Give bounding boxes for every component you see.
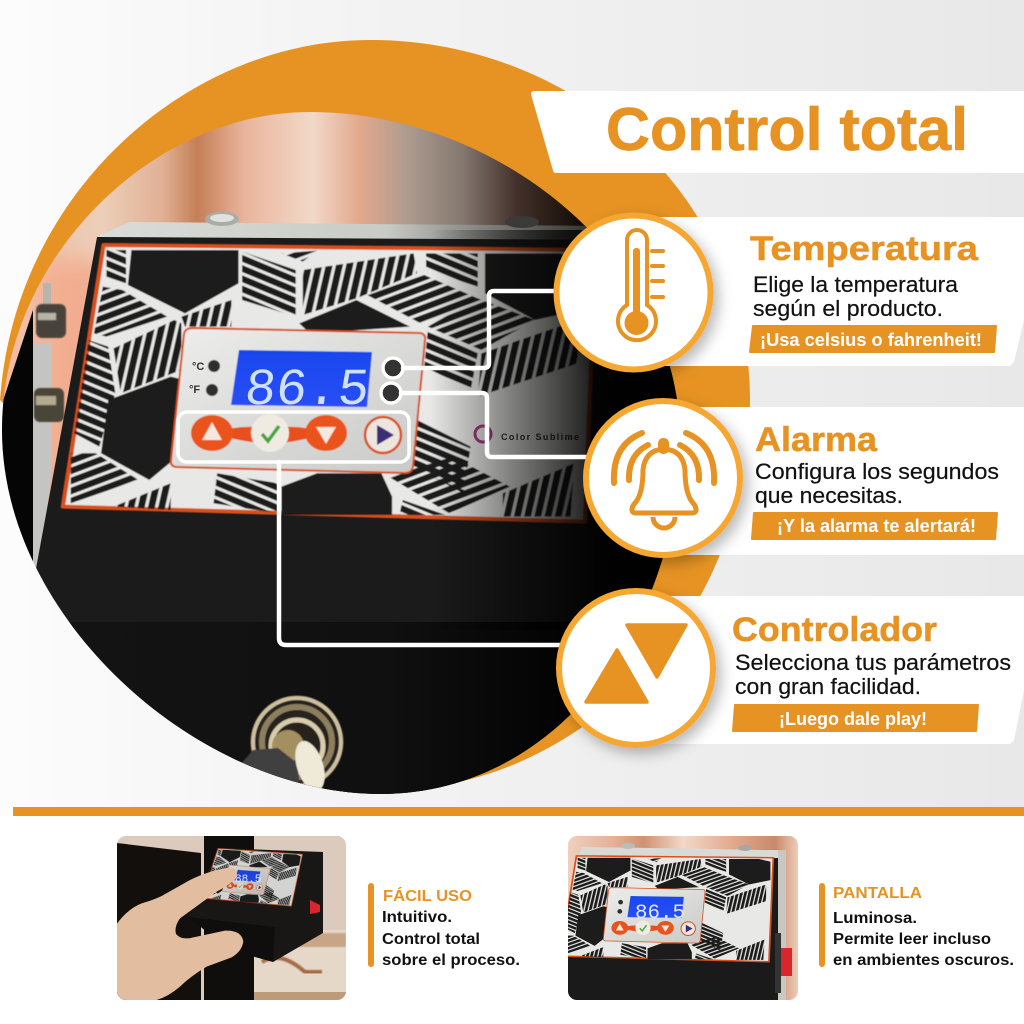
orange circle backdrop	[0, 40, 750, 790]
callout: alarma: ¡Y la alarma te alertará!	[777, 516, 976, 536]
main product photo	[0, 100, 700, 802]
connector lines	[178, 291, 600, 645]
callout: luego dale play: ¡Luego dale play!	[779, 709, 927, 729]
text: alarma description: que necesitas.	[755, 483, 903, 508]
rocker switch	[310, 900, 320, 914]
title banner	[534, 94, 1024, 170]
orange divider bar	[13, 807, 1024, 816]
caption: pantalla: Luminosa.	[833, 910, 917, 927]
caption: fácil uso: Control total	[382, 931, 480, 948]
icon: alarm bell	[586, 401, 740, 555]
caption: fácil uso: Intuitivo.	[382, 909, 452, 926]
title banner: Control total	[606, 96, 968, 163]
brand logo: Color Sublime	[501, 432, 579, 442]
text: controlador description: Selecciona tus parámetros	[735, 650, 1011, 675]
icon: controller triangles	[559, 591, 713, 745]
callout: luego dale play	[733, 705, 978, 731]
thumbnail: hand on controller	[117, 836, 346, 1000]
bottom white section	[0, 816, 1024, 1024]
caption: pantalla: Permite leer incluso	[833, 931, 991, 948]
text: alarma description: Configura los segundos	[755, 459, 999, 484]
text: controlador description	[735, 650, 1011, 699]
caption: pantalla: en ambientes oscuros.	[833, 952, 1014, 969]
thumbnail: control panel close-up	[560, 836, 798, 1000]
hand	[117, 867, 243, 1000]
text: temperatura description: según el producto.	[753, 296, 943, 321]
caption: pantalla	[819, 883, 1014, 969]
icon: thermometer	[556, 216, 710, 370]
celsius and fahrenheit labels: °C	[192, 361, 204, 373]
thumbnail digits: 88.5	[235, 874, 261, 886]
side connectors	[34, 304, 66, 422]
caption: fácil uso	[368, 883, 520, 969]
caption: fácil uso: sobre el proceso.	[382, 952, 520, 969]
celsius and fahrenheit labels: °F	[189, 384, 200, 396]
text: alarma description	[755, 459, 999, 508]
text: temperatura description	[753, 272, 959, 321]
text: temperatura description: Elige la temperatura	[753, 272, 959, 297]
callout: celsius o fahrenheit	[750, 326, 996, 352]
rocker switch	[781, 948, 792, 976]
thumbnail digits: 86.5	[635, 902, 685, 925]
bottom connector	[242, 695, 344, 788]
panel: Alarma	[586, 401, 1024, 555]
callout: alarma	[752, 513, 997, 539]
caption: fácil uso: FÁCIL USO	[383, 886, 472, 905]
panel: Controlador	[559, 591, 1024, 745]
panel: Temperatura	[556, 216, 1024, 370]
text: controlador description: con gran facilidad.	[735, 674, 921, 699]
heading: Temperatura: Temperatura	[750, 230, 979, 268]
display digits: 86.5	[242, 361, 372, 420]
callout: celsius o fahrenheit: ¡Usa celsius o fahrenheit!	[760, 330, 982, 350]
heading: Controlador: Controlador	[732, 611, 937, 649]
caption: pantalla: PANTALLA	[833, 885, 922, 902]
heading: Alarma: Alarma	[755, 421, 878, 459]
celsius and fahrenheit labels	[190, 362, 204, 393]
brand logo	[475, 426, 579, 442]
